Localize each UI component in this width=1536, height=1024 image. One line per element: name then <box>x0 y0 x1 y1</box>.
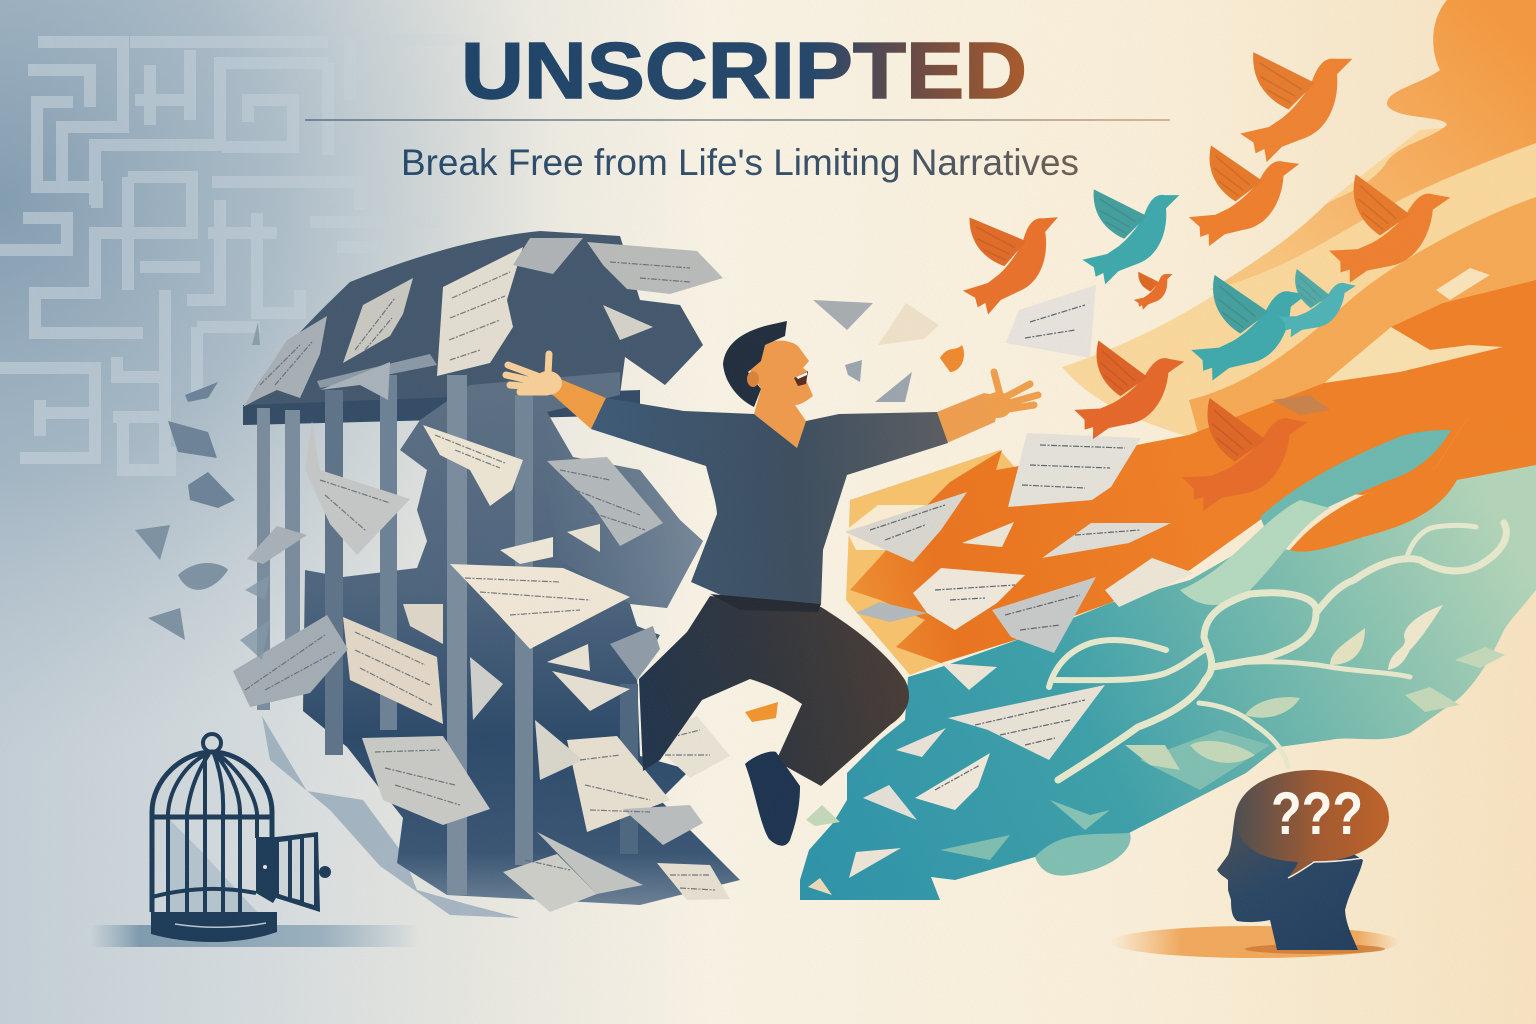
man jumping <box>506 321 1038 846</box>
orange bird <box>1177 396 1309 526</box>
orange bird <box>958 211 1064 316</box>
floating leaves and scraps <box>135 322 270 660</box>
paper scribbles <box>245 262 715 890</box>
cage vertical bars <box>257 375 638 895</box>
neck and face <box>750 341 813 448</box>
shirt <box>591 398 948 604</box>
title rule <box>305 119 1170 121</box>
pants <box>639 596 909 786</box>
floating papers right of man <box>808 285 1194 895</box>
icon: open birdcage <box>90 734 420 947</box>
orange bird large <box>1240 52 1352 162</box>
upper teal lobe <box>1260 430 1451 540</box>
ground glow <box>1110 926 1400 958</box>
icon: head with question bubble <box>1110 770 1400 958</box>
panel: shattering paper cage <box>135 231 740 918</box>
orange swoosh over teal <box>1290 398 1536 552</box>
cage left interior shadow <box>243 390 640 425</box>
dome and body papers <box>233 238 730 912</box>
birds flock <box>958 52 1451 526</box>
front hand and arm <box>937 372 1038 443</box>
cage door <box>256 832 331 912</box>
question marks: ??? <box>1271 780 1363 847</box>
back hand and arm <box>506 354 606 429</box>
sage blobs at wave foot <box>1035 730 1270 876</box>
teal bird <box>1187 273 1308 392</box>
cream cutouts in orange <box>1324 327 1503 383</box>
vine leaves <box>806 605 1505 860</box>
cage base <box>151 912 277 942</box>
title: UNSCRIPTED <box>461 26 1027 115</box>
dome ring <box>317 354 437 388</box>
ear <box>747 371 759 387</box>
small teal bird <box>1275 267 1357 348</box>
speech bubble <box>1235 770 1389 878</box>
small orange and grey scraps <box>745 345 964 722</box>
sage shape <box>1180 500 1330 605</box>
open mouth <box>794 371 808 386</box>
orange bird <box>1185 144 1300 257</box>
subtitle: Break Free from Life's Limiting Narratives <box>401 142 1079 183</box>
head silhouette <box>1217 815 1363 950</box>
flowing wave: teal and sage <box>800 463 1536 900</box>
flowing wave: orange <box>850 280 1536 663</box>
flowing wave: gold under arm <box>846 450 1060 675</box>
orange bird <box>1070 339 1185 452</box>
brown paper scrap <box>1272 395 1330 415</box>
dome body <box>243 231 703 410</box>
flowing wave: mid orange band <box>1189 197 1536 440</box>
hair <box>723 321 787 407</box>
teal bird <box>1082 189 1179 284</box>
flowing wave: peach top right <box>1210 0 1536 290</box>
vine branches <box>1049 523 1506 780</box>
belt shadow <box>710 594 821 612</box>
maze pattern <box>0 36 312 476</box>
flowing wave: pale gold <box>1062 120 1536 440</box>
small orange bird <box>1134 272 1173 310</box>
orange bird <box>1324 172 1451 297</box>
ground debris shadow <box>262 716 520 918</box>
cage body mass <box>303 372 740 905</box>
shoe <box>745 752 800 846</box>
